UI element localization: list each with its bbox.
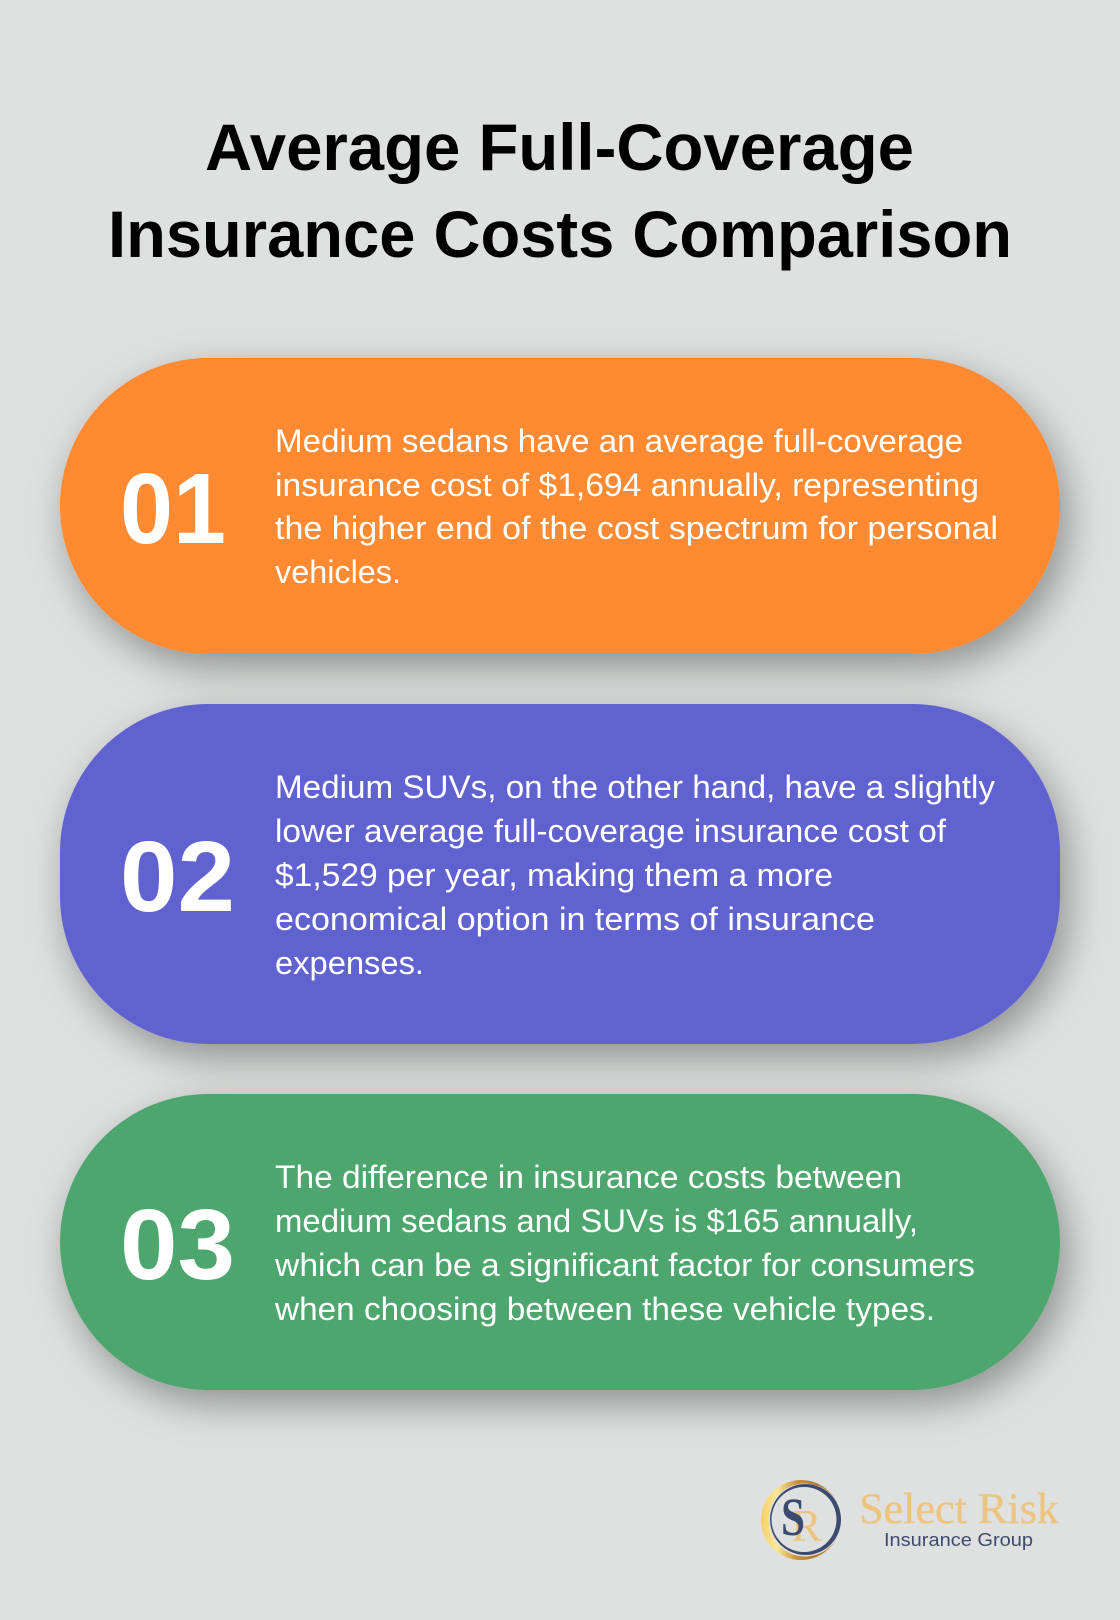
icon: SR monogram: S bbox=[781, 1487, 805, 1547]
text: medium SUVs cost: Medium SUVs, on the other hand, have a slightly bbox=[275, 769, 995, 805]
icon: SR monogram bbox=[761, 1480, 842, 1560]
title: Insurance Costs Comparison bbox=[108, 197, 1012, 271]
title bbox=[108, 110, 1012, 271]
text: medium SUVs cost: economical option in terms of insurance bbox=[275, 901, 875, 937]
title: Average Full-Coverage bbox=[205, 110, 914, 184]
number 03: 03 bbox=[120, 1189, 235, 1301]
number 01: 01 bbox=[120, 453, 226, 565]
logo tagline: Insurance Group bbox=[884, 1530, 1033, 1550]
text: cost difference: The difference in insurance costs between bbox=[275, 1159, 902, 1195]
icon: SR monogram: R bbox=[791, 1500, 822, 1551]
text: medium SUVs cost: expenses. bbox=[275, 945, 424, 981]
logo: Select Risk Insurance Group bbox=[761, 1480, 1060, 1560]
text: cost difference: medium sedans and SUVs is $165 annually, bbox=[275, 1203, 918, 1239]
text: medium sedans cost bbox=[275, 423, 998, 590]
panel: cost difference bbox=[60, 1094, 1060, 1390]
logo wordmark: Select Risk bbox=[859, 1486, 1060, 1533]
number 02: 02 bbox=[120, 821, 235, 933]
text: medium SUVs cost: lower average full-coverage insurance cost of bbox=[275, 813, 946, 849]
text: medium sedans cost: Medium sedans have an average full-coverage bbox=[275, 423, 963, 459]
text: medium SUVs cost bbox=[275, 769, 995, 981]
panel: medium sedans bbox=[60, 358, 1060, 654]
text: medium sedans cost: vehicles. bbox=[275, 554, 401, 590]
text: medium SUVs cost: $1,529 per year, making them a more bbox=[275, 857, 833, 893]
text: cost difference: when choosing between these vehicle types. bbox=[274, 1291, 935, 1327]
text: cost difference: which can be a significant factor for consumers bbox=[274, 1247, 975, 1283]
text: medium sedans cost: the higher end of the cost spectrum for personal bbox=[275, 510, 998, 546]
text: cost difference bbox=[274, 1159, 975, 1327]
panel: medium SUVs bbox=[60, 704, 1060, 1044]
text: medium sedans cost: insurance cost of $1,694 annually, representing bbox=[275, 467, 979, 503]
